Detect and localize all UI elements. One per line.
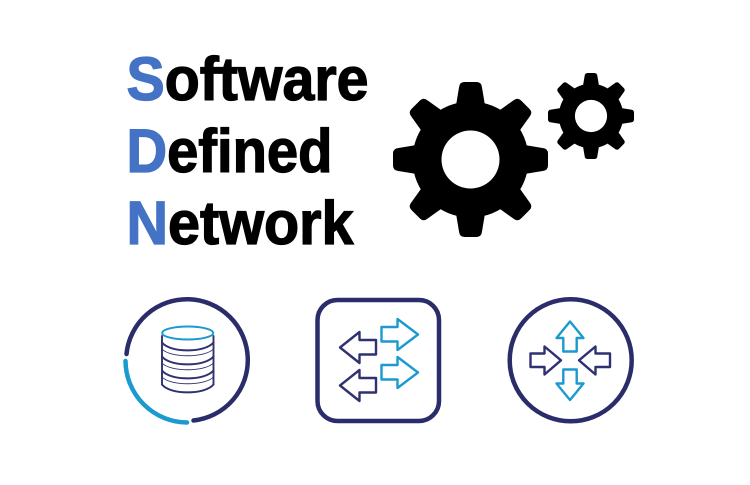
arrow: upper right [382, 319, 418, 350]
circle frame [510, 299, 632, 421]
icon: database in segmented circle [126, 299, 248, 422]
blue ring arc [126, 361, 187, 422]
arrow: right-pointing from left [530, 346, 561, 374]
arrow: up [556, 322, 584, 352]
title: Software Defined Network [126, 45, 368, 257]
arrow: lower right [382, 357, 418, 388]
dark ring arc [126, 299, 248, 420]
arrow: left-pointing from right [579, 346, 610, 374]
title line: Software: Software [126, 45, 368, 113]
icon: switch in rounded square [318, 300, 439, 421]
icon: router in circle [510, 299, 632, 421]
arrow: lower left [340, 370, 376, 401]
title line: Defined: Defined [126, 117, 332, 185]
rounded square frame [318, 300, 439, 421]
icon: large gear [393, 82, 548, 237]
arrow: upper left [340, 332, 376, 363]
icon: small gear [548, 73, 634, 159]
arrow: down [556, 370, 584, 400]
title line: Network: Network [126, 189, 354, 257]
database stack [162, 326, 214, 392]
